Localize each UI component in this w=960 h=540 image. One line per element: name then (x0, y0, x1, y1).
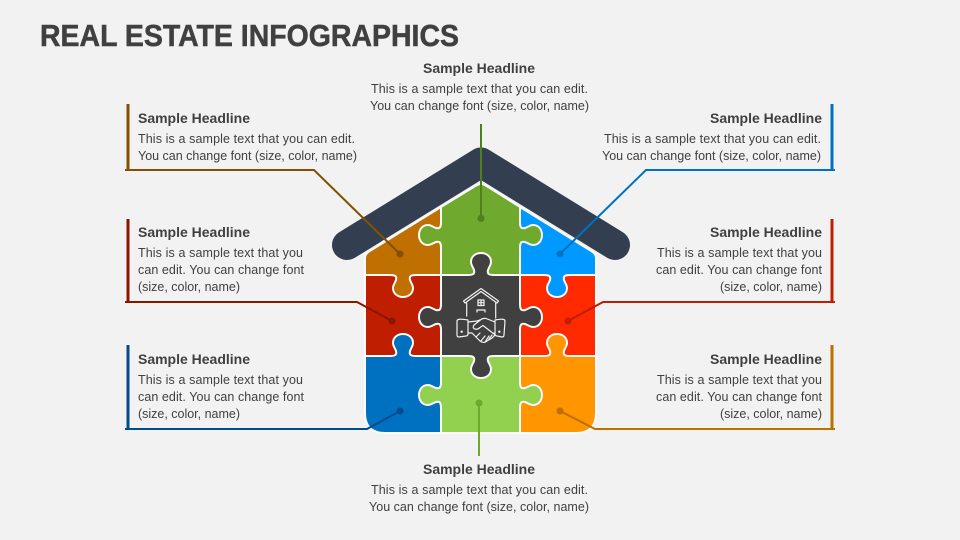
connector: green (478, 124, 484, 222)
callout: top left (125, 104, 404, 258)
puzzle piece: orange (520, 334, 596, 433)
callout: bottom left: Sample Headline (138, 351, 250, 367)
callout: top right (556, 104, 835, 258)
callout: bottom right (556, 345, 835, 429)
callout: middle right: This is a sample text that you (657, 246, 822, 260)
callout: middle left: can edit. You can change font (138, 263, 305, 277)
callout: top centre: This is a sample text that you can edit. (371, 82, 588, 96)
callout: top right: You can change font (size, color, name) (602, 149, 821, 163)
callout: top centre: You can change font (size, color, name) (370, 99, 589, 113)
callout: bottom right: This is a sample text that you (657, 373, 822, 387)
connector: blue (556, 104, 835, 258)
icon: house and handshake (457, 288, 505, 342)
title: REAL ESTATE INFOGRAPHICS (40, 18, 459, 53)
puzzle piece: brown (365, 207, 441, 297)
callout: bottom left: can edit. You can change font (138, 390, 305, 404)
roof (347, 162, 615, 245)
callout: bottom right: Sample Headline (710, 351, 822, 367)
connector: light green (476, 400, 482, 456)
callout: middle left: This is a sample text that you (138, 246, 303, 260)
callout: middle right (564, 219, 835, 324)
callout: bottom left: (size, color, name) (138, 407, 240, 421)
callout: middle left: Sample Headline (138, 224, 250, 240)
callout: top left: This is a sample text that you can edit. (138, 132, 355, 146)
connector: amber (556, 345, 835, 429)
puzzle piece: green (419, 184, 542, 275)
callout: bottom centre (369, 400, 589, 514)
callout: bottom left (125, 345, 404, 429)
callout: top right: Sample Headline (710, 110, 822, 126)
callout: bottom centre: Sample Headline (423, 461, 535, 477)
puzzle piece: dark blue (365, 334, 441, 433)
callout: bottom right: can edit. You can change font (656, 390, 823, 404)
callout: middle left (125, 219, 396, 324)
house puzzle (365, 184, 596, 433)
connector: brown (125, 104, 404, 258)
puzzle piece: sky blue (520, 207, 596, 297)
puzzle piece: bright red (520, 275, 596, 356)
connector: navy blue (125, 345, 404, 429)
puzzle piece: light green (419, 356, 542, 433)
callout: bottom centre: You can change font (size, color, name) (369, 500, 589, 514)
callout: top centre: Sample Headline (423, 60, 535, 76)
callout: top left: You can change font (size, color, name) (138, 149, 357, 163)
callout: middle left: (size, color, name) (138, 280, 240, 294)
callout: bottom right: (size, color, name) (720, 407, 822, 421)
callout: bottom centre: This is a sample text that you can edit. (371, 483, 588, 497)
callout: top right: This is a sample text that you can edit. (604, 132, 821, 146)
connector: dark red (125, 219, 396, 324)
callout: middle right: can edit. You can change font (656, 263, 823, 277)
callout: top left: Sample Headline (138, 110, 250, 126)
callout: middle right: Sample Headline (710, 224, 822, 240)
callout: bottom left: This is a sample text that you (138, 373, 303, 387)
puzzle piece: dark centre (419, 253, 542, 378)
callout: middle right: (size, color, name) (720, 280, 822, 294)
callout: top centre (370, 60, 589, 222)
puzzle piece: dark red (365, 275, 441, 356)
connector: red (564, 219, 835, 324)
